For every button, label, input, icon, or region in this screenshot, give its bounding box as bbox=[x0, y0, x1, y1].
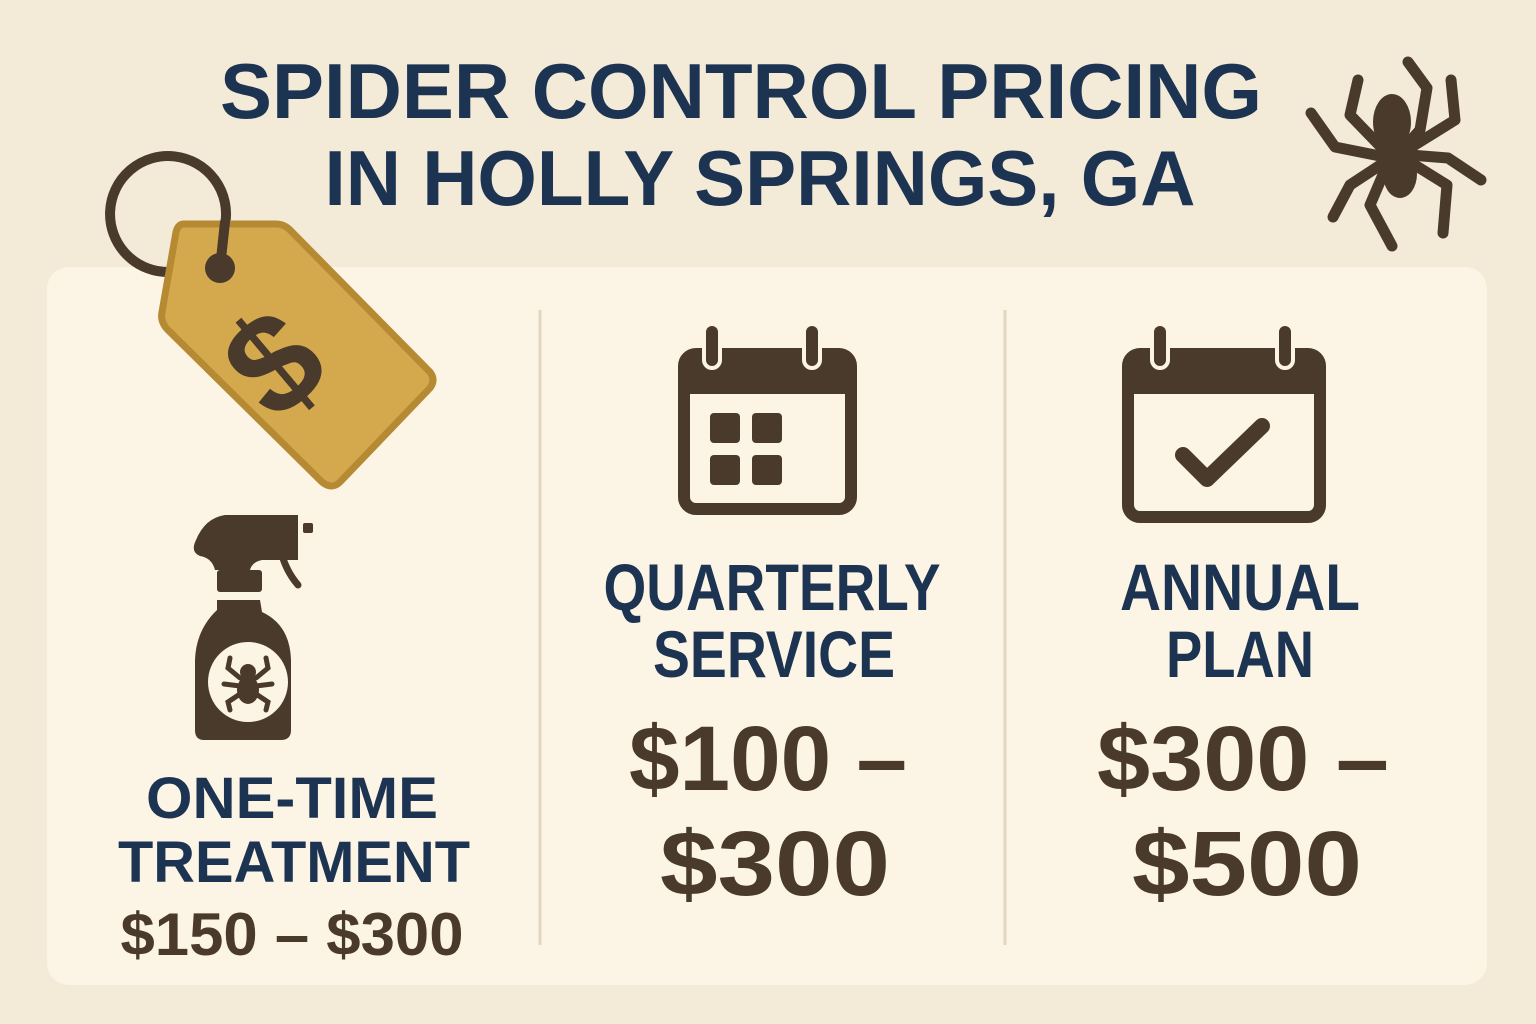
text: annual plan: ANNUAL bbox=[1120, 550, 1360, 624]
text: one-time treatment: $150 – $300 bbox=[120, 901, 464, 968]
text: one-time treatment bbox=[118, 766, 470, 968]
text: quarterly service: $100 – bbox=[629, 708, 907, 810]
text: quarterly service bbox=[604, 550, 940, 915]
text: quarterly service: QUARTERLY bbox=[604, 550, 940, 624]
icon: spray bottle bbox=[194, 515, 313, 740]
text: annual plan bbox=[1097, 550, 1389, 915]
text: quarterly service: $300 bbox=[660, 813, 890, 915]
icon: price tag bbox=[110, 156, 433, 486]
text: annual plan: $300 – bbox=[1097, 708, 1389, 810]
title: SPIDER CONTROL PRICING bbox=[220, 47, 1262, 135]
panel: pricing card bbox=[47, 267, 1487, 985]
text: annual plan: $500 bbox=[1132, 813, 1362, 915]
text: one-time treatment: TREATMENT bbox=[118, 830, 470, 895]
icon: price tag: $ bbox=[194, 278, 354, 448]
title: IN HOLLY SPRINGS, GA bbox=[324, 134, 1196, 222]
icon: spider bbox=[1311, 62, 1481, 246]
title bbox=[220, 47, 1262, 222]
text: annual plan: PLAN bbox=[1166, 617, 1314, 691]
icon: calendar check bbox=[1128, 324, 1320, 517]
text: quarterly service: SERVICE bbox=[653, 617, 895, 691]
icon: calendar grid bbox=[684, 324, 851, 509]
text: one-time treatment: ONE-TIME bbox=[146, 766, 438, 831]
